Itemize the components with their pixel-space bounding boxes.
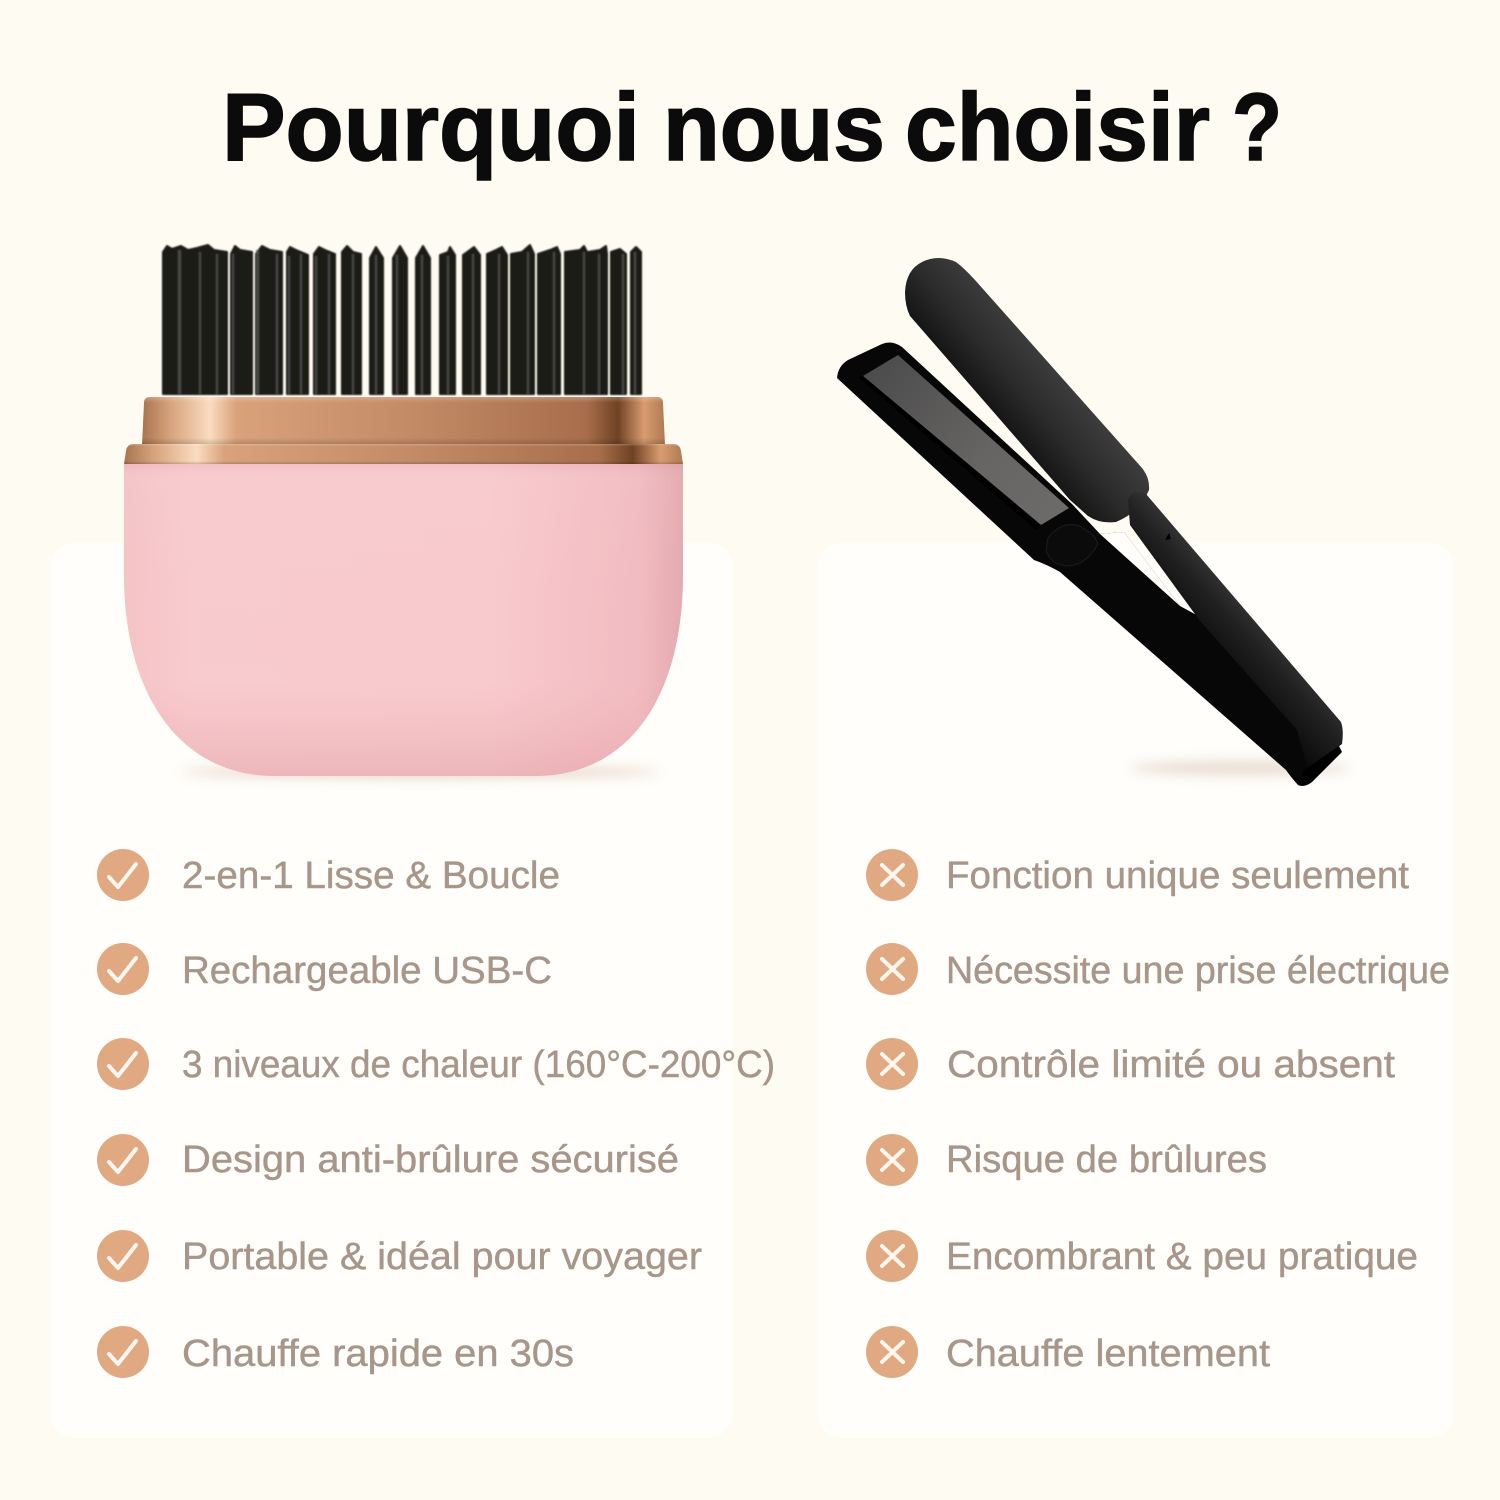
label: Contrôle limité ou absent bbox=[947, 1044, 1395, 1086]
title: choisir bbox=[905, 74, 1210, 181]
plate edge bbox=[858, 376, 1041, 530]
label: Design anti-brûlure sécurisé bbox=[182, 1139, 679, 1181]
item: chauffe rapide bbox=[97, 1326, 574, 1378]
product image: pink heated brush bbox=[124, 245, 683, 778]
end cap bbox=[1299, 746, 1342, 785]
label: Encombrant & peu pratique bbox=[946, 1236, 1418, 1278]
label: Rechargeable USB-C bbox=[182, 950, 552, 992]
panel: right drawbacks card bbox=[817, 543, 1454, 1437]
title: nous bbox=[663, 74, 885, 181]
lower arm and handle bbox=[837, 343, 1340, 786]
item: fonction unique bbox=[866, 849, 1409, 901]
label: Fonction unique seulement bbox=[946, 855, 1409, 897]
label: Chauffe rapide en 30s bbox=[182, 1333, 574, 1375]
icon: cross bbox=[866, 1038, 918, 1090]
item: chauffe lentement bbox=[866, 1326, 1270, 1378]
icon: cross bbox=[866, 1134, 918, 1186]
title: ? bbox=[1232, 74, 1282, 181]
item: USB-C bbox=[97, 943, 552, 995]
brush bristles bbox=[163, 245, 641, 394]
icon: check bbox=[97, 1326, 149, 1378]
icon: cross bbox=[866, 1230, 918, 1282]
item: prise bbox=[866, 943, 1450, 995]
indicator mark bbox=[1165, 533, 1171, 540]
label: Portable & idéal pour voyager bbox=[182, 1236, 702, 1278]
icon: check bbox=[97, 1134, 149, 1186]
icon: check bbox=[97, 1038, 149, 1090]
hinge bbox=[1046, 524, 1098, 566]
label: Risque de brûlures bbox=[946, 1139, 1267, 1181]
iron shadow bbox=[1130, 761, 1350, 775]
opening gap bbox=[1100, 532, 1180, 606]
item: brulures bbox=[866, 1134, 1267, 1186]
pink body bbox=[124, 464, 683, 776]
label: 3 niveaux de chaleur (160°C-200°C) bbox=[182, 1044, 775, 1086]
list: advantages bbox=[97, 849, 775, 1378]
upper arm bbox=[905, 258, 1149, 522]
upper handle bbox=[1128, 492, 1343, 770]
icon: cross bbox=[866, 943, 918, 995]
brush shadow bbox=[180, 766, 660, 778]
icon: cross bbox=[866, 1326, 918, 1378]
item: portable bbox=[97, 1230, 702, 1282]
title: Pourquoi bbox=[222, 74, 640, 181]
label: 2-en-1 Lisse & Boucle bbox=[182, 855, 560, 897]
list: drawbacks bbox=[866, 849, 1450, 1378]
icon: check bbox=[97, 849, 149, 901]
lower copper rim bbox=[124, 444, 683, 464]
upper copper collar bbox=[142, 397, 665, 445]
item: anti-brulure bbox=[97, 1134, 679, 1186]
icon: check bbox=[97, 943, 149, 995]
item: chaleur bbox=[97, 1038, 775, 1090]
item: 2-en-1 bbox=[97, 849, 560, 901]
icon: check bbox=[97, 1230, 149, 1282]
product image: black flat iron bbox=[837, 258, 1350, 786]
icon: cross bbox=[866, 849, 918, 901]
item: controle bbox=[866, 1038, 1395, 1090]
label: Chauffe lentement bbox=[946, 1333, 1270, 1375]
heating plate bbox=[863, 355, 1069, 525]
item: encombrant bbox=[866, 1230, 1418, 1282]
title bbox=[222, 74, 1282, 181]
panel: left advantages card bbox=[50, 543, 733, 1437]
label: Nécessite une prise électrique bbox=[946, 950, 1450, 992]
